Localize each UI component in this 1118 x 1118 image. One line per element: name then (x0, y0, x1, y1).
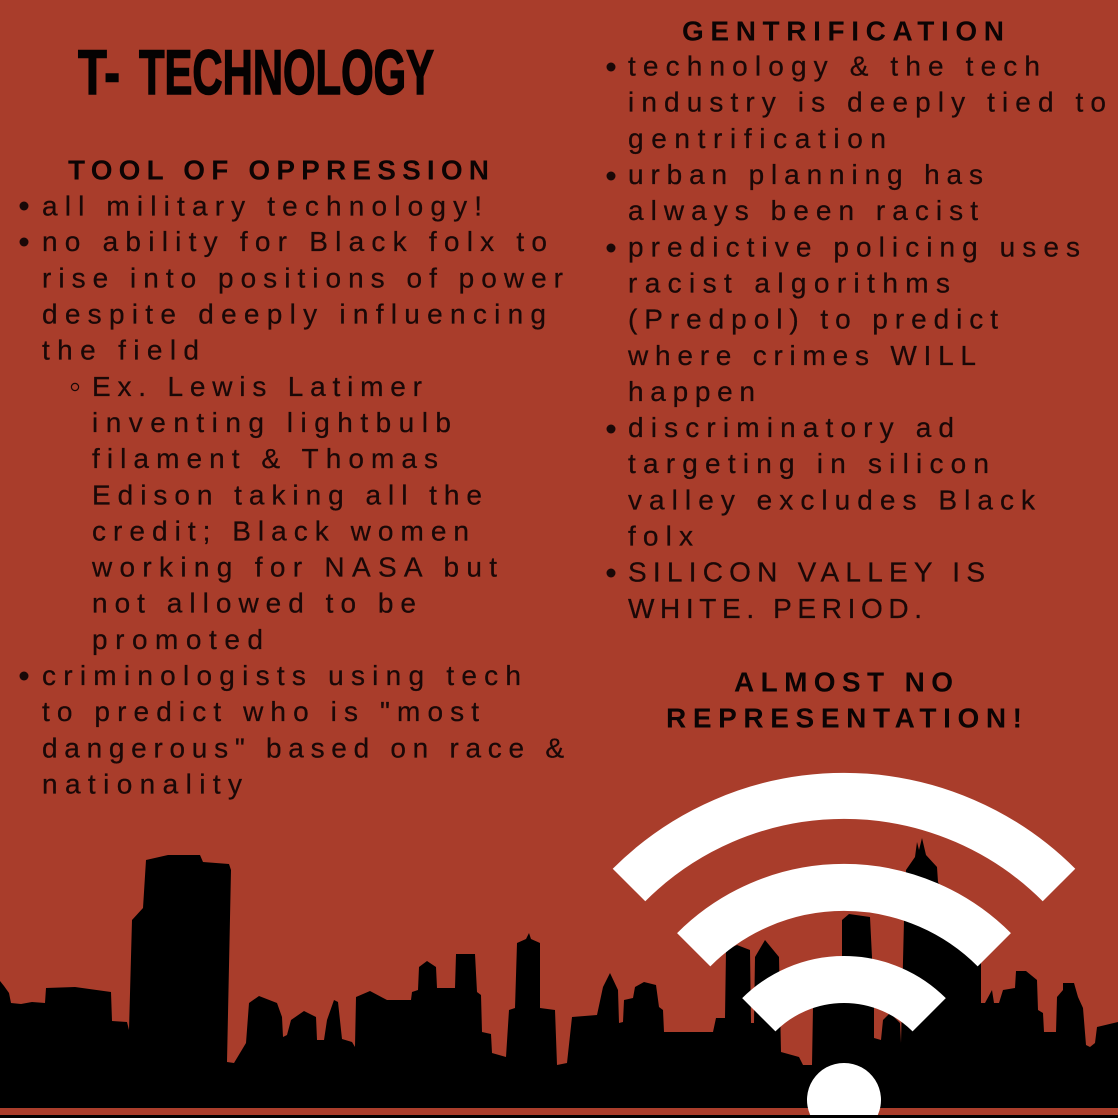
bullet list: tool of oppression: all military technology! (42, 190, 482, 222)
icon: wifi signal (629, 796, 1059, 1115)
title: T- (78, 38, 120, 108)
heading: gentrification: GENTRIFICATION (682, 16, 1004, 46)
bullet list: gentrification: happen (628, 376, 755, 407)
bullet list: tool of oppression: Ex. Lewis Latimer (92, 371, 422, 402)
heading: tool of oppression: TOOL OF OPPRESSION (68, 154, 489, 186)
bullet list: gentrification: urban planning has (628, 159, 983, 190)
callout: almost no representation: REPRESENTATION! (666, 702, 1022, 734)
bullet list: gentrification: technology & the tech (628, 51, 1040, 82)
bullet list: tool of oppression: no ability for Black folx to (42, 226, 547, 257)
bullet list: tool of oppression (20, 190, 564, 800)
bullet list: tool of oppression: inventing lightbulb (92, 407, 451, 438)
bullet list: gentrification: always been racist (628, 195, 978, 226)
bullet list: gentrification: SILICON VALLEY IS (628, 557, 985, 588)
bullet list: tool of oppression: the field (42, 335, 199, 366)
bullet list: gentrification: predictive policing uses (628, 231, 1080, 262)
bullet list: gentrification: racist algorithms (628, 268, 950, 298)
bullet list: gentrification (606, 51, 1106, 624)
bullet list: tool of oppression: working for NASA but (91, 552, 497, 583)
bullet list: tool of oppression: credit; Black women (92, 515, 469, 546)
bullet list: tool of oppression: nationality (42, 768, 242, 800)
title: TECHNOLOGY (139, 38, 434, 108)
panel: tool of oppression (20, 154, 564, 800)
bullet list: tool of oppression: filament & Thomas (92, 443, 438, 474)
bullet list: gentrification: gentrification (628, 123, 886, 154)
title (78, 38, 434, 108)
callout: almost no representation (666, 666, 1022, 734)
bullet list: gentrification: valley excludes Black (628, 484, 1036, 515)
bullet list: tool of oppression: criminologists using tech (42, 660, 521, 691)
bullet list: gentrification: folx (628, 521, 693, 552)
bullet list: tool of oppression: rise into positions of power (42, 262, 563, 293)
bullet list: tool of oppression: to predict who is "most (42, 696, 479, 727)
bullet list: tool of oppression: promoted (92, 624, 263, 655)
callout: almost no representation: ALMOST NO (734, 666, 953, 698)
panel: gentrification (606, 16, 1106, 734)
bullet list: tool of oppression: Edison taking all the (92, 479, 482, 510)
city skyline silhouette (0, 838, 1118, 1118)
bullet list: gentrification: (Predpol) to predict (628, 304, 998, 335)
bullet list: gentrification: where crimes WILL (627, 340, 976, 371)
bullet list: tool of oppression: not allowed to be (92, 588, 416, 619)
bullet list: tool of oppression: despite deeply influencing (42, 299, 546, 330)
bullet list: gentrification: targeting in silicon (628, 448, 989, 479)
bullet list: gentrification: industry is deeply tied to (628, 87, 1106, 118)
bullet list: tool of oppression: dangerous" based on race & (42, 732, 564, 763)
bullet list: gentrification: discriminatory ad (628, 412, 954, 443)
bullet list: gentrification: WHITE. PERIOD. (628, 593, 922, 624)
